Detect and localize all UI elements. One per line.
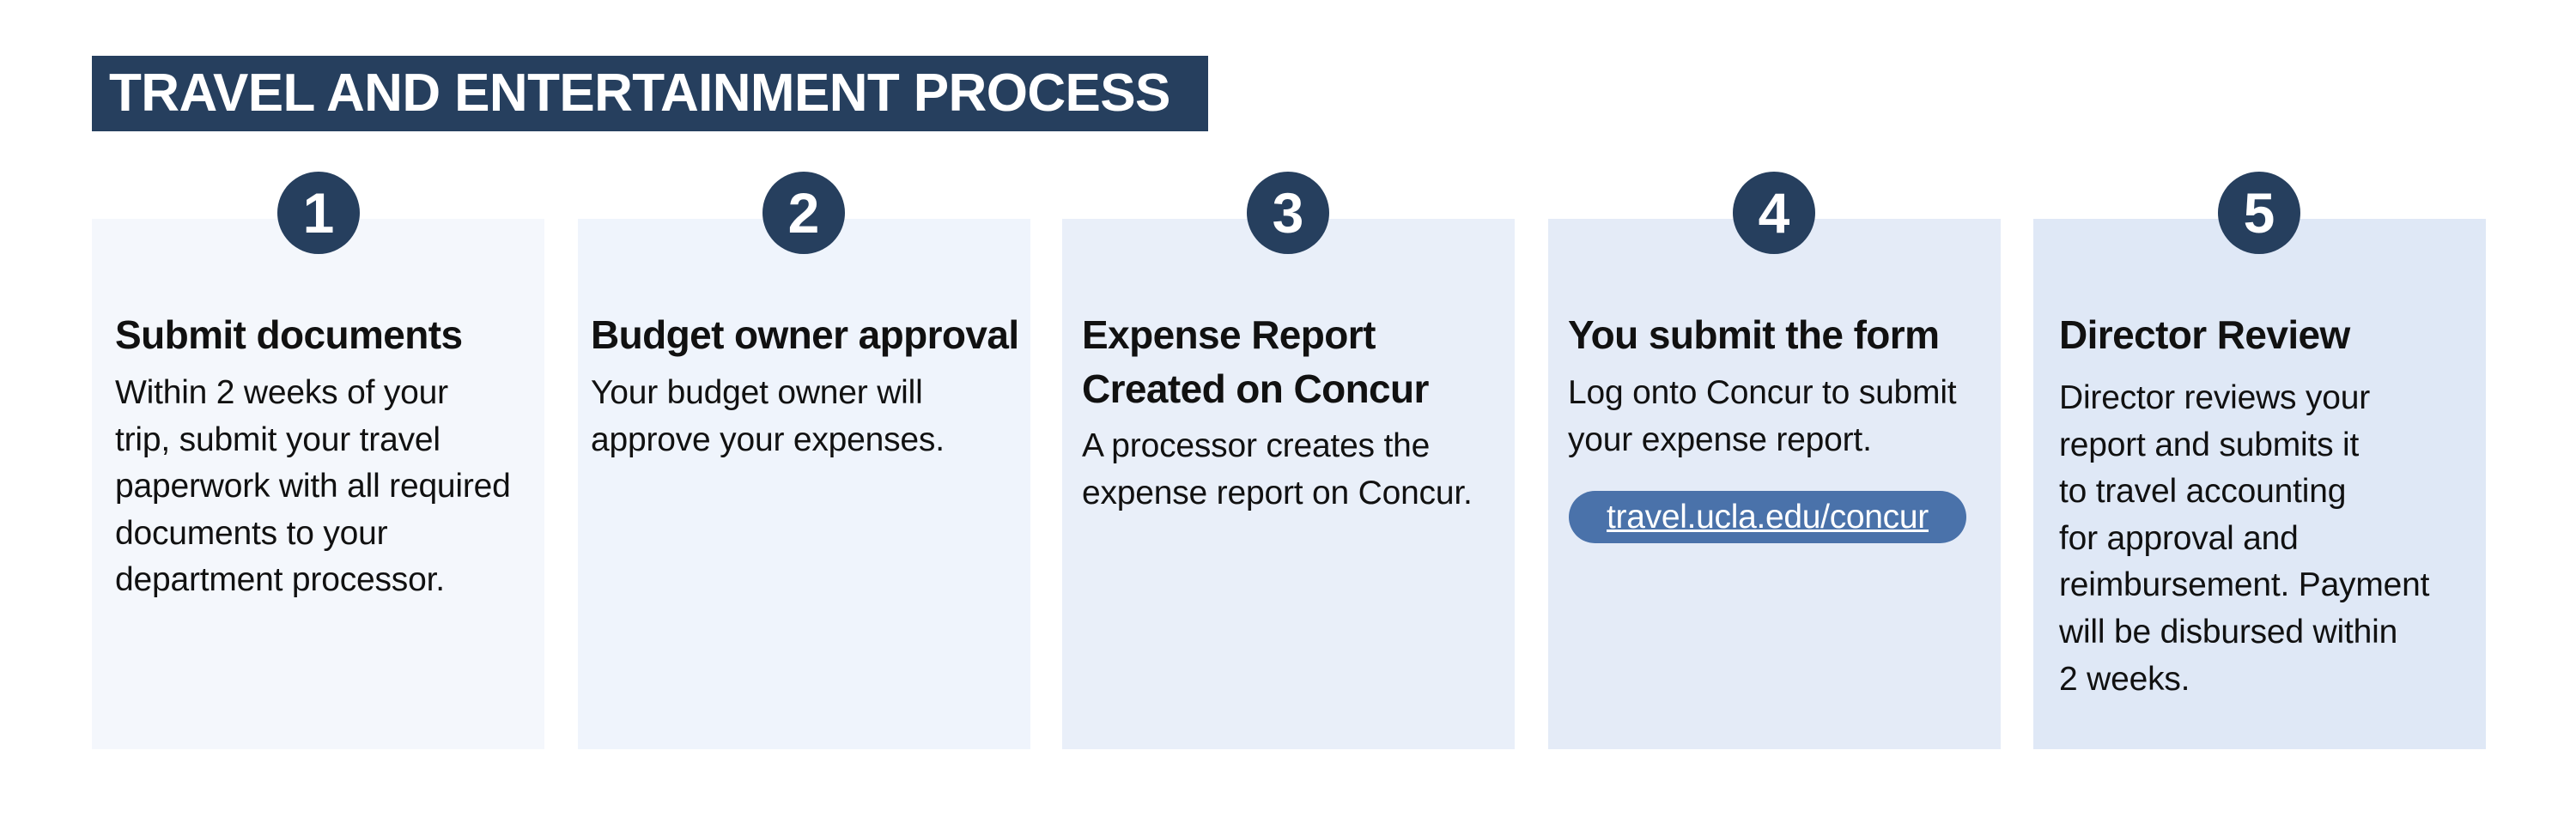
link pill: travel.ucla.edu/concur	[1607, 499, 1929, 536]
text: step 5 body: Director reviews your	[2059, 379, 2370, 416]
text: step 3 body	[1082, 427, 1473, 511]
text: step 2 body	[591, 374, 945, 458]
text: step 4 body: Log onto Concur to submit	[1568, 374, 1956, 411]
text: step 2 body: approve your expenses.	[591, 421, 945, 458]
icon: number 1: 1	[303, 181, 334, 245]
text: step 4 body: your expense report.	[1568, 421, 1872, 458]
text: step 5 body: 2 weeks.	[2059, 661, 2190, 698]
heading: expense report created on concur: Expense Report	[1082, 312, 1376, 357]
text: step 5 body: for approval and	[2059, 520, 2299, 557]
icon: number 3	[1247, 172, 1329, 254]
text: step 2 body: Your budget owner will	[591, 374, 923, 411]
text: step 4 body	[1568, 374, 1956, 458]
text: step 1 body: trip, submit your travel	[115, 421, 440, 458]
panel: step 1	[92, 219, 544, 749]
icon: number 2: 2	[788, 181, 819, 245]
text: step 1 body: paperwork with all required	[115, 468, 511, 505]
text: step 5 body	[2059, 379, 2430, 698]
panel: step 2	[578, 219, 1030, 749]
text: step 5 body: will be disbursed within	[2059, 614, 2397, 651]
panel: step 3	[1062, 219, 1515, 749]
icon: number 5	[2218, 172, 2300, 254]
heading: director review: Director Review	[2059, 312, 2350, 357]
panel: step 4	[1548, 219, 2001, 749]
text: step 1 body	[115, 374, 511, 598]
heading: budget owner approval: Budget owner approval	[591, 312, 1019, 357]
icon: number 1	[277, 172, 360, 254]
text: step 5 body: to travel accounting	[2059, 473, 2346, 510]
link pill	[1569, 491, 1966, 543]
text: step 1 body: department processor.	[115, 561, 445, 598]
text: step 1 body: documents to your	[115, 515, 387, 552]
panel: step 5	[2033, 219, 2486, 749]
heading: expense report created on concur	[1082, 312, 1429, 411]
text: step 3 body: expense report on Concur.	[1082, 475, 1473, 511]
text: step 5 body: report and submits it	[2059, 427, 2359, 463]
heading: you submit the form: You submit the form	[1568, 312, 1939, 357]
text: step 5 body: reimbursement. Payment	[2059, 566, 2429, 603]
text: step 1 body: Within 2 weeks of your	[115, 374, 448, 411]
icon: number 2	[762, 172, 845, 254]
text: step 3 body: A processor creates the	[1082, 427, 1430, 464]
heading: expense report created on concur: Created on Concur	[1082, 366, 1429, 411]
icon: number 5: 5	[2244, 181, 2275, 245]
title: TRAVEL AND ENTERTAINMENT PROCESS	[109, 64, 1170, 123]
icon: number 4: 4	[1759, 181, 1789, 245]
icon: number 3: 3	[1273, 181, 1303, 245]
icon: number 4	[1733, 172, 1815, 254]
heading: submit documents: Submit documents	[115, 312, 462, 357]
